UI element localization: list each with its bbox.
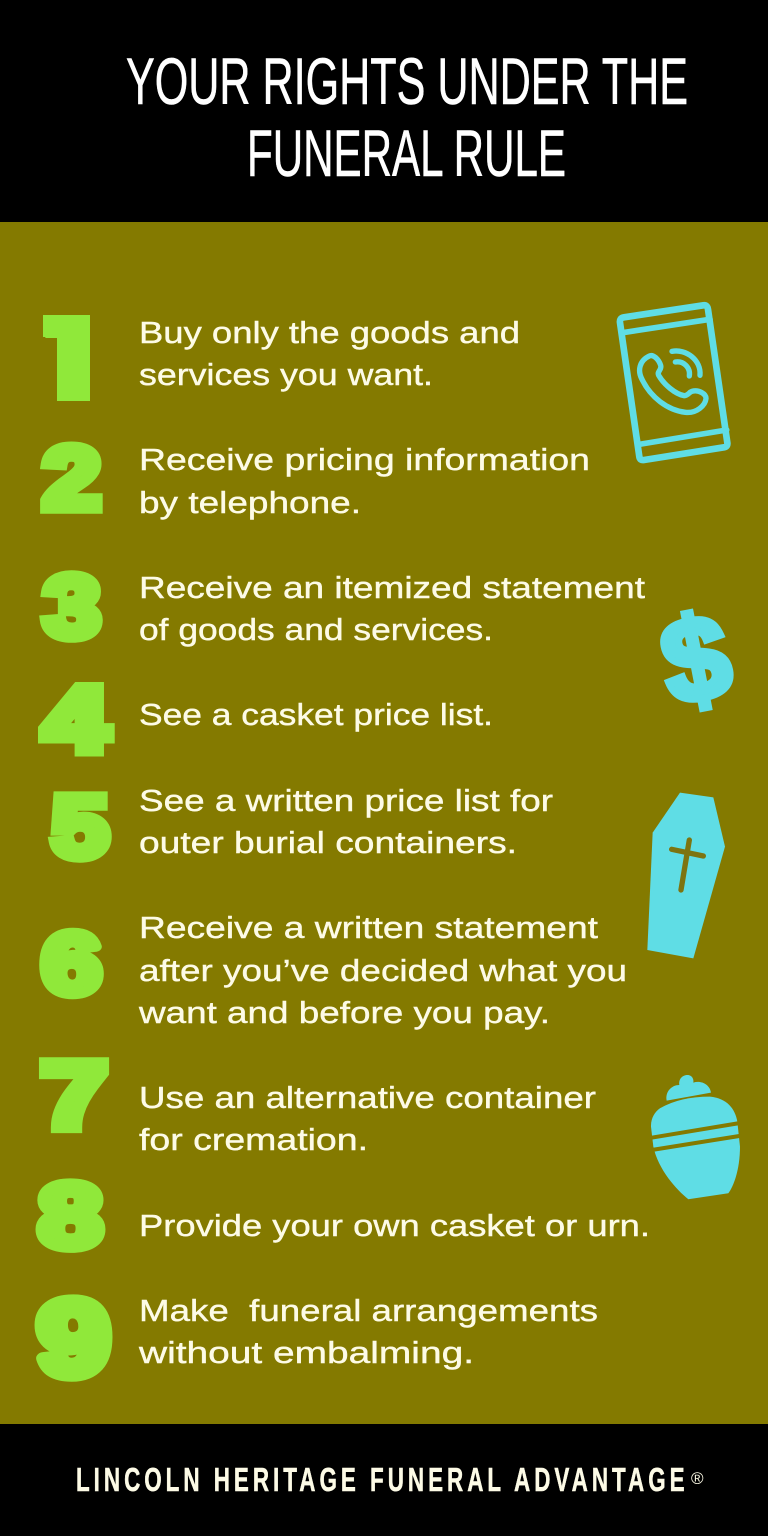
right 3: 3 — [44, 558, 100, 656]
title — [126, 44, 688, 190]
panel: rights list — [36, 302, 650, 1397]
footer brand name: LINCOLN HERITAGE FUNERAL ADVANTAGE — [76, 1461, 685, 1498]
icon: dollar sign: $ — [651, 589, 741, 731]
right 8: 8 — [39, 1165, 102, 1266]
right 6: after you’ve decided what you — [139, 953, 627, 988]
right 2 — [43, 430, 590, 528]
right 2: Receive pricing information — [139, 442, 590, 477]
right 7: for cremation. — [139, 1122, 368, 1157]
right 9: 9 — [38, 1279, 110, 1397]
right 9 — [38, 1279, 598, 1397]
right 8: Provide your own casket or urn. — [139, 1208, 650, 1243]
right 1 — [36, 302, 520, 414]
right 8 — [39, 1165, 650, 1266]
right 6: Receive a written statement — [139, 910, 598, 945]
right 1: Buy only the goods and — [139, 315, 520, 350]
right 9: Make funeral arrangements — [139, 1293, 598, 1328]
right 7: 7 — [41, 1043, 107, 1148]
right 5 — [52, 778, 553, 876]
footer band — [0, 1424, 768, 1536]
icon: phone with call symbol — [620, 305, 727, 460]
registered mark: ® — [691, 1469, 704, 1488]
header band — [0, 0, 768, 222]
right 1: 1 — [45, 302, 87, 414]
right 5: 5 — [52, 778, 108, 876]
right 9: without embalming. — [138, 1335, 474, 1370]
right 6 — [42, 910, 627, 1030]
right 6: 6 — [42, 915, 101, 1012]
title: FUNERAL RULE — [247, 116, 566, 190]
right 7 — [41, 1043, 596, 1157]
right 1: services you want. — [139, 357, 433, 392]
right 4: 4 — [43, 669, 108, 771]
right 4: See a casket price list. — [139, 697, 493, 732]
right 7: Use an alternative container — [139, 1080, 596, 1115]
right 3: of goods and services. — [139, 612, 493, 647]
right 3 — [44, 558, 645, 656]
right 2: by telephone. — [139, 485, 361, 520]
icon: urn — [650, 1075, 742, 1199]
right 5: outer burial containers. — [139, 825, 517, 860]
right 5: See a written price list for — [139, 783, 553, 818]
right 2: 2 — [43, 430, 101, 528]
right 3: Receive an itemized statement — [139, 570, 645, 605]
right 6: want and before you pay. — [138, 995, 550, 1030]
icon: coffin with cross — [647, 793, 725, 958]
right 4 — [43, 669, 493, 771]
